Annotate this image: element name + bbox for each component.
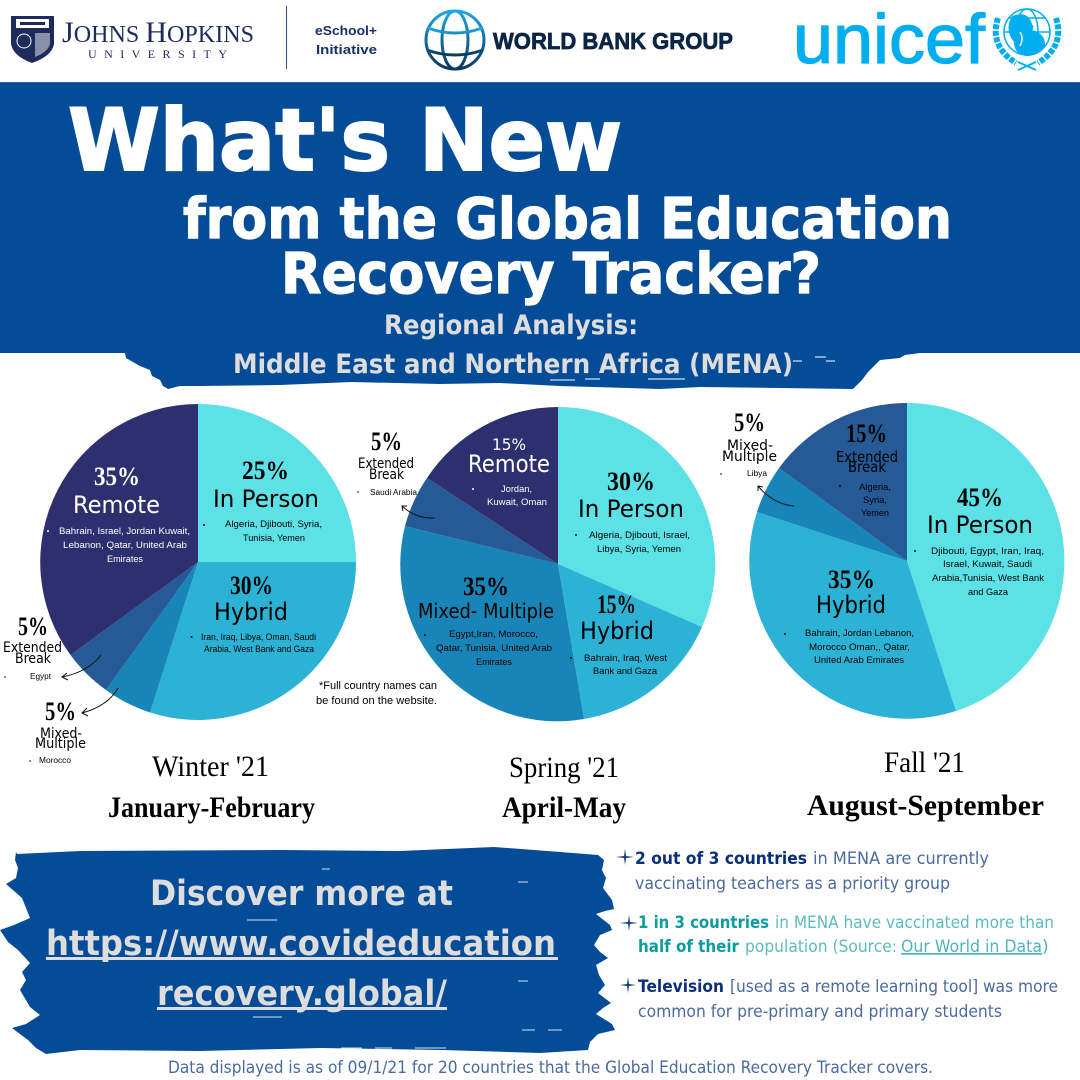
callout: mixed multiple: Mixed-: [40, 726, 82, 742]
key fact: population vaccination: 1 in 3 countries: [638, 913, 769, 933]
slice label: in person: [575, 467, 690, 555]
slice label: remote: [47, 462, 190, 565]
slice label: remote: Emirates: [107, 554, 143, 565]
panel: Spring '21 pie chart: [357, 407, 715, 721]
footer note: Data displayed is as of 09/1/21 for 20 countries that the Global Education Recovery Tracker covers.: [168, 1058, 933, 1078]
slice label: extended break: Extended: [836, 448, 898, 466]
callout: mixed multiple: Mixed-: [727, 438, 773, 454]
link text: website address: [46, 924, 558, 1014]
footnote: be found on the website.: [316, 695, 437, 707]
slice label: remote: Bahrain, Israel, Jordan Kuwait,: [59, 526, 190, 537]
key fact: teacher vaccination: in MENA are currently: [813, 849, 989, 869]
period label: Winter: Winter '21: [152, 750, 269, 783]
slice label: remote: [468, 435, 550, 508]
callout: mixed multiple: 5%: [45, 697, 76, 726]
slice label: hybrid: [570, 590, 667, 677]
key fact: population vaccination: ): [1042, 937, 1049, 957]
subtitle: Middle East and Northern Africa (MENA): [233, 349, 793, 380]
slice label: extended break: Syria,: [863, 495, 887, 506]
slice label: in person: 25%: [242, 456, 289, 485]
title: [68, 91, 952, 307]
text: discover more: Discover more at: [150, 874, 453, 914]
slice label: hybrid: Bank and Gaza: [593, 666, 658, 677]
link text: website address: https://www.covideducation: [46, 924, 556, 964]
icon: sparkle: [620, 915, 638, 931]
slice label: remote: Remote: [468, 450, 550, 478]
header banner: [0, 82, 1080, 389]
slice label: in person: and Gaza: [968, 587, 1009, 598]
slice label: in person: Tunisia, Yemen: [243, 533, 305, 544]
slice label: in person: Arabia,Tunisia, West Bank: [932, 573, 1044, 584]
slice label: mixed multiple: Egypt,Iran, Morocco,: [449, 629, 538, 640]
callout: mixed multiple: 5%: [734, 408, 765, 437]
slice label: in person: Libya, Syria, Yemen: [597, 544, 681, 555]
slice label: in person: Djibouti, Egypt, Iran, Iraq,: [931, 546, 1044, 557]
callout: extended break: Extended: [358, 456, 414, 472]
callout: extended break: [357, 427, 418, 497]
period label: Fall: August-September: [807, 789, 1044, 822]
slice label: mixed multiple: Qatar, Tunisia, United Arab: [436, 643, 552, 654]
callout: mixed multiple: Libya: [747, 469, 768, 478]
logo: unicef: unicef: [793, 0, 986, 78]
subtitle: Regional Analysis:: [384, 310, 638, 341]
slice label: mixed multiple: 35%: [463, 572, 509, 601]
slice label: remote: Kuwait, Oman: [487, 497, 547, 508]
slice label: hybrid: Hybrid: [816, 591, 886, 619]
slice label: hybrid: Morocco Oman,, Qatar,: [809, 642, 910, 653]
slice label: hybrid: Hybrid: [580, 617, 654, 645]
icon: sparkle: [616, 849, 634, 865]
callout: mixed multiple: Multiple: [35, 736, 86, 752]
slice label: mixed multiple: Emirates: [476, 657, 512, 668]
slice label: in person: In Person: [578, 495, 684, 523]
period label: Winter: [108, 750, 315, 824]
arrow: extended break: [402, 506, 435, 518]
slice label: hybrid: [784, 565, 914, 666]
key fact: population vaccination: half of their: [638, 937, 740, 957]
logo: eSchool+ Initiative: [286, 6, 377, 69]
title: from the Global Education: [183, 187, 952, 252]
slice label: remote: Jordan,: [501, 484, 532, 495]
callout: extended break: 5%: [18, 612, 48, 641]
callout: mixed multiple: Morocco: [39, 756, 72, 765]
slice label: in person: In Person: [213, 485, 319, 513]
slice label: in person: Algeria, Djibouti, Israel,: [589, 530, 690, 541]
logo: Johns Hopkins University: JOHNS HOPKINS: [62, 16, 254, 49]
callout: extended break: [3, 612, 62, 681]
slice label: remote: Remote: [73, 491, 160, 519]
slice label: in person: [914, 483, 1044, 598]
period label: Fall: [807, 746, 1044, 822]
slice label: extended break: Break: [848, 458, 886, 476]
slice label: extended break: 15%: [846, 419, 887, 448]
title: Recovery Tracker?: [281, 242, 821, 307]
slice label: remote: 15%: [492, 435, 526, 454]
panel: Fall '21 pie chart: [720, 403, 1064, 719]
callout: extended break: Extended: [3, 640, 62, 656]
logo: Johns Hopkins University: UNIVERSITY: [88, 47, 227, 61]
slice label: in person: Israel, Kuwait, Saudi: [943, 559, 1032, 570]
slice label: hybrid: United Arab Emirates: [814, 655, 904, 666]
slice label: hybrid: Bahrain, Iraq, West: [584, 653, 667, 664]
key fact: population vaccination: in MENA have vaccinated more than: [775, 913, 1054, 933]
callout: extended break: Saudi Arabia: [370, 488, 418, 497]
key fact: population vaccination: population (Source:: [745, 937, 897, 957]
logo: eSchool+ Initiative: Initiative: [316, 42, 377, 57]
slice label: hybrid: 35%: [828, 565, 875, 594]
logo: World Bank Group: WORLD BANK GROUP: [493, 28, 733, 54]
arrow: extended break: [62, 655, 101, 680]
slice label: extended break: Yemen: [861, 508, 889, 519]
footnote: *Full country names can: [319, 680, 437, 692]
slice label: hybrid: 30%: [230, 571, 273, 600]
slice label: in person: [203, 456, 322, 544]
panel: Winter '21 pie chart: [3, 404, 356, 765]
key fact: population vaccination: Our World in Data: [901, 937, 1042, 957]
slice label: hybrid: 15%: [597, 590, 636, 619]
key fact: teacher vaccination: 2 out of 3 countries: [635, 849, 807, 869]
slice label: in person: In Person: [927, 511, 1033, 539]
slice label: mixed multiple: [418, 572, 554, 668]
callout: mixed multiple: [720, 408, 777, 478]
period label: Spring: April-May: [502, 791, 626, 824]
slice label: hybrid: Iran, Iraq, Libya, Oman, Saudi: [201, 632, 316, 643]
logo: World Bank Group: [426, 11, 733, 69]
key fact: teacher vaccination: [616, 849, 989, 894]
key fact: teacher vaccination: vaccinating teachers as a priority group: [635, 874, 950, 894]
title: What's New: [68, 91, 622, 191]
slice label: in person: 30%: [607, 467, 655, 496]
slice label: hybrid: Bahrain, Jordan Lebanon,: [805, 628, 914, 639]
callout: mixed multiple: Multiple: [722, 449, 777, 465]
slice label: hybrid: Hybrid: [214, 598, 288, 626]
key fact: television: [620, 977, 1058, 1022]
slice label: remote: 35%: [94, 462, 140, 491]
slice label: in person: 45%: [957, 483, 1003, 512]
period label: Fall: Fall '21: [884, 746, 965, 779]
callout: extended break: Break: [369, 467, 405, 483]
key fact: television: Television: [638, 977, 724, 997]
period label: Spring: [502, 751, 626, 824]
slice label: hybrid: [190, 571, 316, 655]
period label: Winter: January-February: [108, 791, 315, 824]
slice label: extended break: [836, 419, 898, 519]
icon: sparkle: [620, 977, 636, 993]
slice label: hybrid: Arabia, West Bank and Gaza: [204, 644, 315, 655]
link text: website address: recovery.global/: [157, 974, 447, 1014]
slice label: mixed multiple: Mixed- Multiple: [418, 599, 554, 623]
key fact: television: common for pre-primary and primary students: [638, 1002, 1002, 1022]
callout: extended break: Break: [15, 651, 52, 667]
key fact: population vaccination: [620, 913, 1054, 957]
callout: extended break: 5%: [371, 427, 402, 456]
subtitle: [233, 310, 793, 380]
slice label: extended break: Algeria,: [859, 482, 891, 493]
arrow: mixed multiple: [82, 688, 118, 716]
slice label: remote: Lebanon, Qatar, United Arab: [63, 540, 187, 551]
footnote: [316, 680, 437, 707]
period label: Spring: Spring '21: [509, 751, 619, 784]
callout: mixed multiple: [29, 697, 86, 765]
slice label: in person: Algeria, Djibouti, Syria,: [225, 519, 322, 530]
logo: eSchool+ Initiative: eSchool+: [315, 23, 377, 38]
callout: extended break: Egypt: [30, 672, 52, 681]
logo: Johns Hopkins University: [11, 16, 254, 63]
arrow: mixed multiple: [758, 486, 794, 506]
panel: discover more call to action: [0, 847, 615, 1054]
